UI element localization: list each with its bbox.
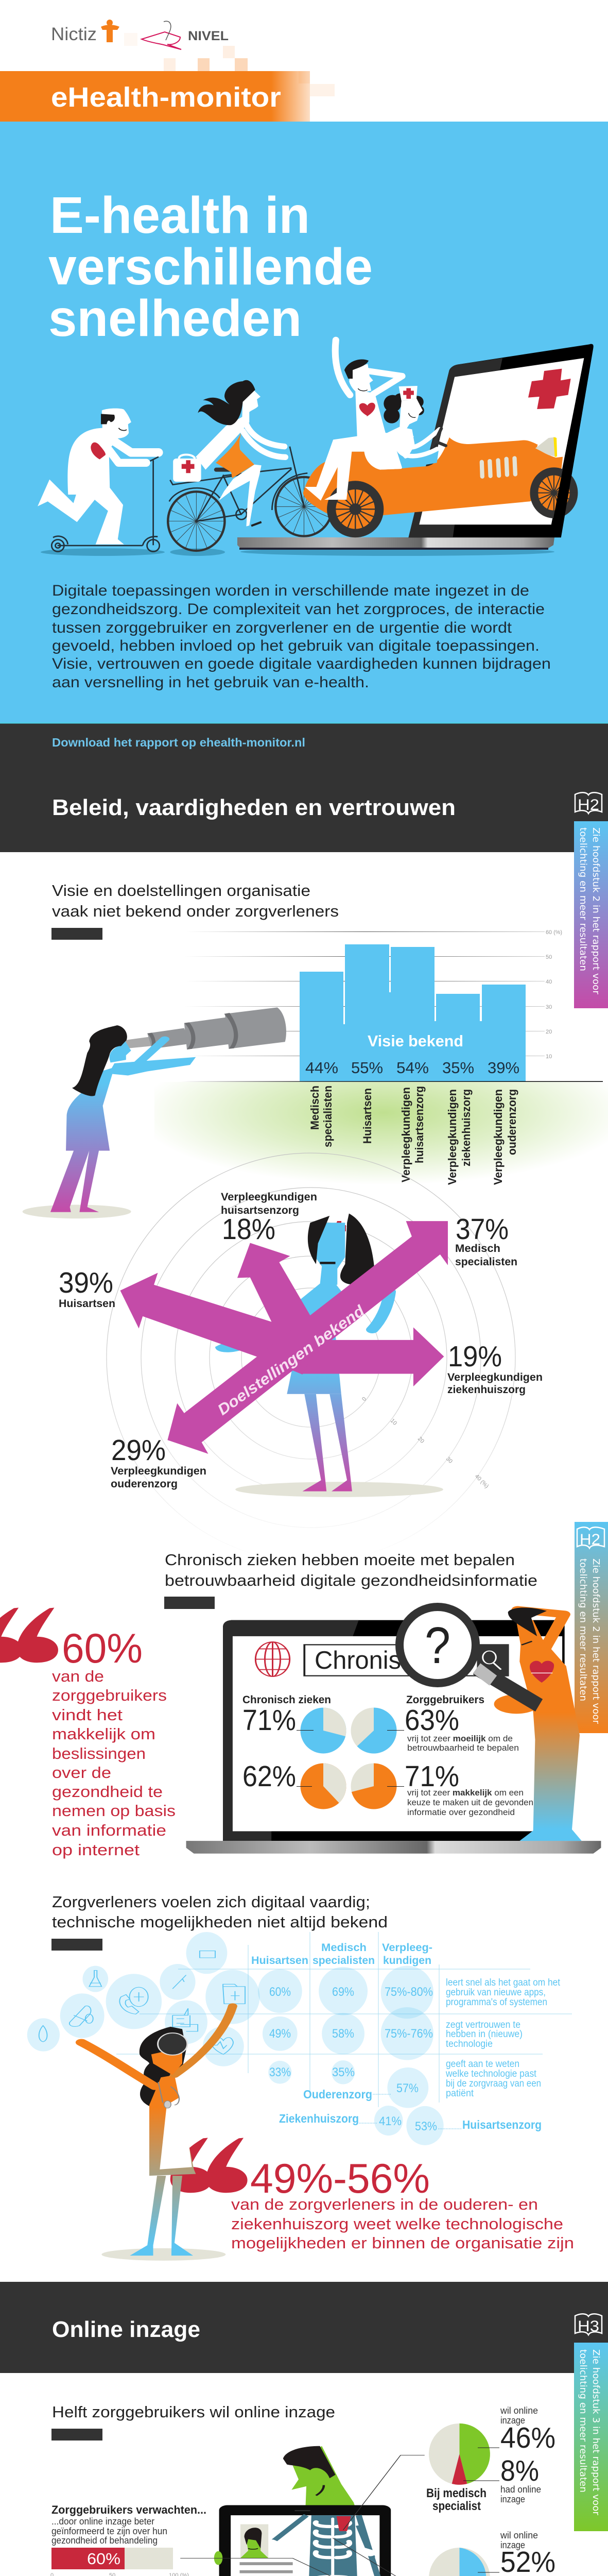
tab: see chapter 2: toelichting en meer resultaten	[578, 827, 588, 971]
table: digitale vaardigheden bubbles: 75%-80%	[385, 1985, 433, 1999]
value: 19%: 19%	[448, 1340, 502, 1373]
table: digitale vaardigheden bubbles: 41%	[379, 2114, 402, 2128]
chart: visie bekend bars: 54%	[396, 1059, 429, 1077]
text: intro paragraph: aan versnelling in het gebruik van e-health.	[52, 674, 369, 691]
value: 37%	[455, 1213, 517, 1268]
table: digitale vaardigheden bubbles: programma's of systemen	[446, 1997, 547, 2008]
label on arrow: Doelstellingen bekend	[215, 1302, 368, 1419]
icon: book H2	[575, 792, 602, 814]
chart: visie bekend bars: 50	[546, 954, 552, 960]
title: snelheden	[48, 290, 302, 347]
heading band: Beleid, vaardigheden en vertrouwen	[0, 722, 608, 852]
chart: online inzage bars: geïnformeerd te zijn over hun	[51, 2526, 167, 2536]
quote: 60%: zorggebruikers	[52, 1686, 167, 1704]
chart: visie bekend bars: Medisch	[308, 1086, 321, 1130]
table: digitale vaardigheden bubbles	[27, 1932, 572, 2145]
chart: doelstellingen radial: 20	[416, 1436, 425, 1445]
quote: 49%-56%: mogelijkheden er binnen de organisatie zijn	[231, 2234, 574, 2252]
heading: chronisch zieken	[165, 1551, 537, 1589]
heading: visie: vaak niet bekend onder zorgverleners	[52, 902, 339, 920]
chart: online inzage bars: gezondheid of behandeling	[51, 2535, 158, 2546]
logo: Nictiz: Nictiz	[51, 24, 97, 44]
heading: chronisch zieken: Chronisch zieken hebben moeite met bepalen	[165, 1551, 515, 1569]
chart: online inzage bars	[50, 2503, 206, 2576]
chart: visie bekend bars: specialisten	[321, 1086, 334, 1147]
value: 29%: 29%	[111, 1434, 166, 1467]
heading: visie	[52, 882, 339, 920]
chart: pie medisch specialist: inzage	[500, 2494, 525, 2504]
table: digitale vaardigheden bubbles: welke technologie past	[445, 2069, 537, 2079]
chart: pie huisarts	[429, 2530, 555, 2576]
text: intro paragraph: tussen zorggebruiker en zorgverlener en de urgentie die wordt	[52, 619, 512, 636]
dark tag	[51, 928, 102, 940]
table: digitale vaardigheden bubbles: 35%	[332, 2065, 355, 2079]
chart: visie bekend bars: ouderenzorg	[506, 1089, 518, 1155]
heading: helft zorggebruikers: Helft zorggebruikers wil online inzage	[52, 2403, 335, 2421]
title: verschillende	[48, 238, 373, 296]
value: 19%: Verpleegkundigen	[447, 1371, 543, 1383]
leader lines	[180, 2455, 427, 2576]
quote: 60%: van informatie	[52, 1821, 166, 1839]
quote: 60%	[0, 1608, 176, 1859]
illustration: man with magnifier	[399, 1607, 582, 1841]
tab: see chapter 2 (second): Zie hoofdstuk 2 in het rapport voor	[590, 1558, 601, 1724]
section: header	[0, 20, 335, 122]
quote: 60%: over de	[52, 1764, 111, 1782]
quote: 49%-56%: ziekenhuiszorg weet welke technologische	[231, 2215, 563, 2233]
value: 18%	[221, 1191, 317, 1246]
table: digitale vaardigheden bubbles: 33%	[269, 2065, 291, 2079]
chart: online inzage bars: Zorggebruikers verwachten...	[51, 2503, 206, 2516]
dark tag	[51, 1939, 102, 1951]
chart: pie medisch specialist: Bij medisch	[426, 2486, 487, 2500]
illustration: man with magnifier: ?	[425, 1617, 450, 1674]
table: digitale vaardigheden bubbles: 57%	[396, 2081, 419, 2095]
quote: 60%: gezondheid te	[52, 1783, 163, 1801]
heading: zorgverleners: Zorgverleners voelen zich digitaal vaardig;	[52, 1893, 370, 1911]
value: 39%: Huisartsen	[59, 1298, 115, 1310]
quote: 60%: nemen op basis	[52, 1802, 176, 1820]
chart: visie bekend bars: 55%	[351, 1059, 383, 1077]
value: 37%: Medisch	[455, 1243, 500, 1255]
chart: visie bekend bars: 40	[546, 979, 552, 985]
chart: doelstellingen radial: 30	[445, 1456, 454, 1465]
chart: pie medisch specialist	[426, 2405, 555, 2513]
table: digitale vaardigheden bubbles: Ziekenhuiszorg	[279, 2112, 359, 2125]
tab: see chapter 2 (second): H2	[580, 1531, 600, 1548]
chart: visie bekend bars: Verpleegkundigen	[399, 1087, 412, 1182]
panel: intro background	[0, 122, 608, 723]
chart: pie medisch specialist: wil online	[500, 2405, 538, 2416]
table: digitale vaardigheden bubbles: 69%	[332, 1985, 354, 1999]
chart: pie medisch specialist: had online	[500, 2484, 541, 2495]
heading band: Online inzage	[0, 2282, 608, 2373]
text: intro paragraph: Visie, vertrouwen en goede digitale vaardigheden kunnen bijdragen	[52, 655, 551, 672]
table: digitale vaardigheden bubbles: Verpleeg-	[382, 1942, 432, 1954]
icon: book H3	[575, 2314, 602, 2335]
chart: chronisch zieken pies: 62%	[242, 1760, 296, 1793]
chart: chronisch zieken pies	[242, 1694, 533, 1817]
illustration: old man on scooter	[38, 409, 165, 556]
tab: see chapter 2	[574, 821, 608, 1008]
illustration: laptop with search: Chronis	[315, 1647, 401, 1674]
illustration: laptop base	[237, 537, 554, 556]
value: 18%: 18%	[222, 1213, 275, 1246]
chart: chronisch zieken pies: 71%	[242, 1704, 296, 1737]
value: 39%: 39%	[59, 1266, 113, 1299]
table: digitale vaardigheden bubbles: Medisch	[321, 1942, 367, 1954]
chart: doelstellingen radial: 10	[389, 1418, 398, 1427]
chart: doelstellingen radial	[59, 1153, 543, 1562]
decorative pixels	[124, 33, 335, 96]
logo: NIVEL: NIVEL	[188, 29, 229, 43]
table: digitale vaardigheden bubbles: 60%	[269, 1985, 291, 1999]
quote: 60%: 60%	[62, 1625, 143, 1672]
title	[48, 187, 373, 347]
chart: chronisch zieken pies: betrouwbaarheid te bepalen	[407, 1743, 519, 1753]
chart: chronisch zieken pies: 71%	[405, 1760, 459, 1793]
table: digitale vaardigheden bubbles: gebruik van nieuwe apps,	[446, 1987, 546, 1998]
illustration: laptop with search	[186, 1620, 601, 1854]
chart: visie bekend bars: 35%	[442, 1059, 474, 1077]
table: digitale vaardigheden bubbles: technologie	[446, 2039, 493, 2049]
table: digitale vaardigheden bubbles: leert snel als het gaat om het	[446, 1977, 561, 1988]
chart: visie bekend bars: 39%	[488, 1059, 519, 1077]
value: 18%: Verpleegkundigen	[221, 1191, 317, 1203]
banner: eHealth-monitor	[0, 71, 310, 122]
table: digitale vaardigheden bubbles: hebben in (nieuwe)	[446, 2029, 523, 2040]
chart: visie bekend bars: Verpleegkundigen	[492, 1089, 505, 1185]
heading: zorgverleners: technische mogelijkheden niet altijd bekend	[52, 1913, 388, 1931]
chart: pie medisch specialist: 46%	[500, 2421, 555, 2454]
chart: chronisch zieken pies: keuze te maken uit de gevonden	[407, 1798, 533, 1807]
chart: pie huisarts: wil online	[500, 2530, 538, 2540]
chart: visie bekend bars: 20	[546, 1029, 552, 1035]
table: digitale vaardigheden bubbles: zegt vertrouwen te	[446, 2020, 520, 2030]
table: digitale vaardigheden bubbles: Huisartsen	[251, 1955, 308, 1967]
icon: book H2: H2	[578, 796, 599, 814]
quote: 60%: beslissingen	[52, 1744, 146, 1762]
heading: chronisch zieken: betrouwbaarheid digitale gezondheidsinformatie	[165, 1571, 537, 1589]
table: digitale vaardigheden bubbles: 75%-76%	[385, 2027, 433, 2041]
value: 19%: ziekenhuiszorg	[447, 1384, 526, 1396]
chart: pie medisch specialist: specialist	[432, 2499, 481, 2513]
table: digitale vaardigheden bubbles: Huisartsenzorg	[462, 2118, 542, 2131]
chart: visie bekend bars: 30	[546, 1004, 552, 1010]
table: digitale vaardigheden bubbles: kundigen	[383, 1955, 431, 1967]
table: digitale vaardigheden bubbles: patiënt	[446, 2088, 474, 2099]
chart: visie bekend bars: 10	[546, 1054, 552, 1060]
icons: medical outline set	[39, 1951, 245, 2054]
chart: chronisch zieken pies: Chronisch zieken	[242, 1694, 331, 1706]
dark tag	[51, 2429, 102, 2441]
title: E-health in	[50, 187, 310, 244]
tab: see chapter 2 (second): toelichting en meer resultaten	[578, 1558, 588, 1701]
chart: visie bekend bars	[136, 929, 608, 1185]
illustration: woman behind arrows	[215, 1213, 443, 1497]
tab: see chapter 2: Zie hoofdstuk 2 in het rapport voor	[590, 827, 601, 995]
illustration: laptop with car	[303, 340, 594, 537]
icon: book H3: H3	[578, 2318, 599, 2335]
logo: NIVEL	[142, 21, 229, 49]
quote: 49%-56%	[170, 2138, 574, 2252]
value: 29%	[111, 1434, 206, 1490]
chart: doelstellingen radial: 40 (%)	[474, 1473, 490, 1489]
illustration: woman with telescope	[23, 1007, 286, 1218]
chart: pie medisch specialist: inzage	[500, 2415, 525, 2426]
text: intro paragraph: gevoeld, hebben invloed op het gebruik van digitale toepassingen.	[52, 637, 540, 654]
heading band: Beleid, vaardigheden en vertrouwen: Beleid, vaardigheden en vertrouwen	[52, 795, 456, 820]
arrows	[120, 1221, 448, 1454]
chart: pie huisarts: inzage	[500, 2540, 525, 2550]
quote: 60%: op internet	[52, 1841, 140, 1859]
tab: see chapter 3	[574, 2343, 608, 2531]
value: 18%: huisartsenzorg	[221, 1205, 299, 1216]
chart: chronisch zieken pies: 63%	[405, 1704, 459, 1737]
table: digitale vaardigheden bubbles: geeft aan te weten	[446, 2059, 519, 2070]
value: 29%: Verpleegkundigen	[111, 1465, 206, 1477]
chart: visie bekend bars: 44%	[305, 1059, 338, 1077]
quote: 49%-56%: 49%-56%	[250, 2156, 430, 2202]
chart: chronisch zieken pies: vrij tot zeer moeilijk om de	[407, 1734, 513, 1743]
table: digitale vaardigheden bubbles: specialisten	[312, 1955, 375, 1967]
value: 37%: 37%	[456, 1213, 509, 1246]
value: 37%: specialisten	[455, 1256, 517, 1268]
chart: visie bekend bars: ziekenhuiszorg	[460, 1089, 473, 1166]
dark tag	[164, 1597, 215, 1609]
skeleton	[271, 2515, 379, 2576]
chart: visie bekend bars: Huisartsen	[361, 1088, 374, 1144]
table: digitale vaardigheden bubbles: 49%	[269, 2027, 291, 2041]
chart: visie bekend bars: 60 (%)	[546, 929, 562, 936]
chart: visie bekend bars: huisartsenzorg	[413, 1086, 426, 1163]
chart: visie bekend bars: Verpleegkundigen	[446, 1089, 459, 1185]
illustration: woman on bicycle	[167, 380, 334, 556]
quote: 60%: makkelijk om	[52, 1725, 155, 1743]
table: digitale vaardigheden bubbles: 58%	[332, 2027, 354, 2041]
table: digitale vaardigheden bubbles: Ouderenzorg	[303, 2088, 372, 2101]
logo: Nictiz	[51, 20, 119, 44]
banner: eHealth-monitor: eHealth-monitor	[51, 82, 281, 113]
chart: pie medisch specialist: 8%	[500, 2454, 539, 2487]
quote: 49%-56%: van de zorgverleners in de ouderen- en	[231, 2195, 538, 2213]
tab: see chapter 2 (second)	[575, 1522, 608, 1733]
tab: see chapter 3: Zie hoofdstuk 3 in het rapport voor	[590, 2349, 601, 2516]
chart: chronisch zieken pies: informatie over gezondheid	[407, 1807, 515, 1817]
quote: 60%: van de	[52, 1667, 104, 1685]
text: intro paragraph	[52, 582, 551, 691]
chart: chronisch zieken pies: Zorggebruikers	[406, 1694, 484, 1706]
illustration: man with tablet x-ray	[214, 2446, 396, 2576]
heading: zorgverleners	[52, 1893, 388, 1931]
chart: doelstellingen radial: 0	[361, 1396, 368, 1402]
text: intro paragraph: gezondheidszorg. De complexiteit van het zorgproces, de interactie	[52, 601, 545, 618]
chart: chronisch zieken pies: vrij tot zeer makkelijk om een	[407, 1788, 524, 1798]
value: 19%	[447, 1340, 543, 1396]
chart: online inzage bars: 60%	[87, 2550, 120, 2568]
tab: see chapter 3: toelichting en meer resultaten	[578, 2349, 588, 2493]
heading band: Beleid, vaardigheden en vertrouwen: Download het rapport op ehealth-monitor.nl	[52, 736, 305, 749]
chart: online inzage bars: ...door online inzage beter	[51, 2516, 154, 2527]
illustration: woman with goggles	[81, 2006, 233, 2261]
chart: visie bekend bars: Visie bekend	[368, 1032, 463, 1050]
table: digitale vaardigheden bubbles: 53%	[415, 2120, 437, 2133]
table: digitale vaardigheden bubbles: bij de zorgvraag van een	[446, 2078, 541, 2089]
heading: visie: Visie en doelstellingen organisatie	[52, 882, 310, 900]
value: 29%: ouderenzorg	[111, 1478, 178, 1490]
quote: 60%: vindt het	[52, 1706, 123, 1724]
heading band: Online inzage: Online inzage	[52, 2317, 200, 2342]
text: intro paragraph: Digitale toepassingen worden in verschillende mate ingezet in de	[52, 582, 529, 599]
